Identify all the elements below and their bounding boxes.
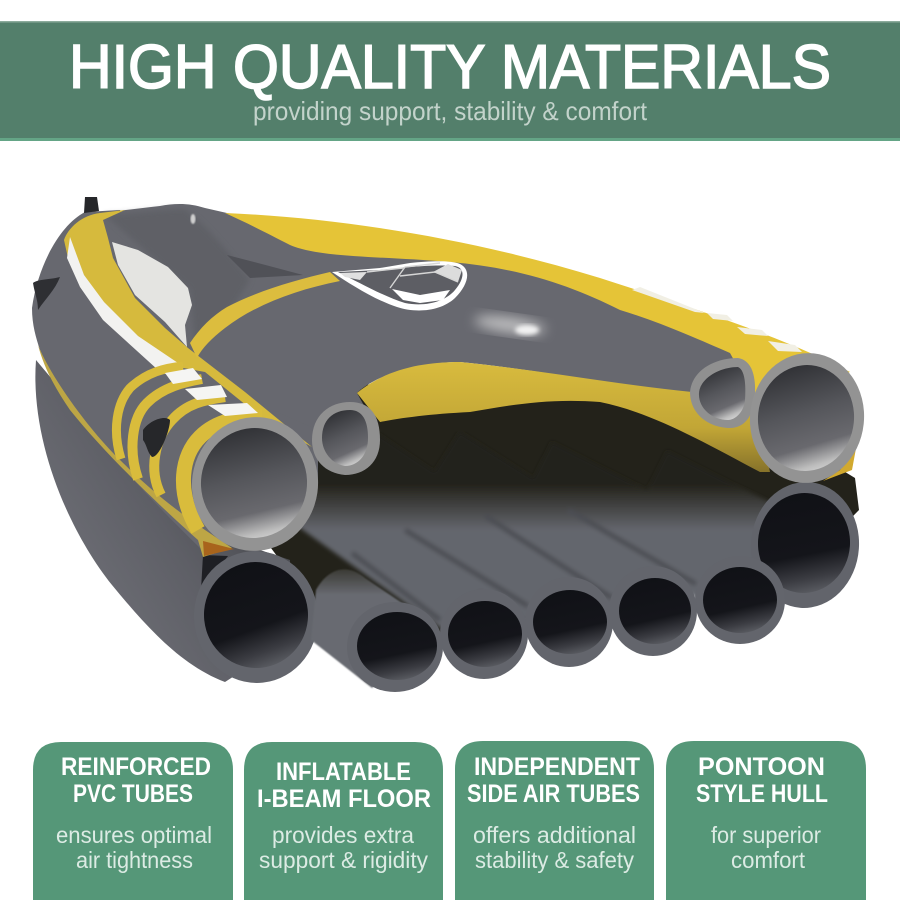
deck highlight core xyxy=(515,325,539,335)
card description: provides extra xyxy=(272,822,414,848)
white patches on left tube xyxy=(165,368,258,416)
floor tube end E xyxy=(609,566,697,656)
cockpit white panel xyxy=(112,242,192,347)
underside yellow band xyxy=(357,362,770,472)
card description: comfort xyxy=(731,847,806,873)
card heading: I-BEAM FLOOR xyxy=(257,785,431,813)
card description xyxy=(259,822,428,873)
seam flap left xyxy=(38,345,232,557)
card heading: INFLATABLE xyxy=(276,758,411,786)
valve: bow xyxy=(33,277,60,310)
right top yellow band xyxy=(225,213,850,405)
cross band yellow xyxy=(190,272,340,358)
logo badge xyxy=(332,261,467,310)
floor tube end F xyxy=(695,556,785,644)
subtitle: providing support, stability & comfort xyxy=(253,96,648,126)
header banner xyxy=(0,21,900,141)
card heading xyxy=(61,753,211,808)
right big air tube end xyxy=(744,347,870,489)
right white patches xyxy=(632,287,802,352)
card: inflatable I-beam floor xyxy=(244,742,443,900)
left yellow stripe xyxy=(64,210,312,447)
card description: stability & safety xyxy=(475,847,634,873)
right small air tube end xyxy=(690,358,755,428)
card description: ensures optimal xyxy=(56,822,212,848)
card heading: INDEPENDENT xyxy=(474,753,640,781)
card heading: PVC TUBES xyxy=(73,780,193,808)
card heading xyxy=(467,753,640,808)
floor tubes: bodies xyxy=(300,463,790,620)
cockpit shadow xyxy=(105,209,250,345)
card description: for superior xyxy=(711,822,821,848)
floor tube end D xyxy=(525,577,613,667)
logo white crescent xyxy=(392,289,450,303)
valve: left tube xyxy=(143,418,170,457)
left small air tube end xyxy=(312,402,380,475)
logo line work xyxy=(367,263,458,288)
floor tube B body xyxy=(311,569,435,688)
card description: air tightness xyxy=(76,847,193,873)
logo right facet xyxy=(433,264,462,282)
right flap xyxy=(823,443,857,481)
card heading: REINFORCED xyxy=(61,753,211,781)
lower pontoon hull: outer left tube xyxy=(35,360,325,689)
card description xyxy=(473,822,636,873)
left white stripe xyxy=(67,237,183,374)
kayak cross-section illustration xyxy=(32,197,870,692)
orange seam detail xyxy=(203,541,234,556)
valley shadows xyxy=(352,510,696,620)
cockpit floor panel xyxy=(227,255,303,278)
floor tube end B xyxy=(347,602,443,692)
card heading xyxy=(696,753,828,808)
card heading: PONTOON xyxy=(698,753,825,781)
card description xyxy=(56,822,212,873)
card heading: STYLE HULL xyxy=(696,780,828,808)
card description: offers additional xyxy=(473,822,636,848)
cockpit highlight dot xyxy=(190,214,196,224)
right outer tube end xyxy=(747,478,863,612)
logo left facet xyxy=(340,272,367,280)
title: HIGH QUALITY MATERIALS xyxy=(69,33,831,102)
left big air tube end xyxy=(183,409,327,559)
card description: support & rigidity xyxy=(259,847,428,873)
card: reinforced PVC tubes xyxy=(33,742,233,900)
dark gap under seam xyxy=(201,555,228,590)
card heading: SIDE AIR TUBES xyxy=(467,780,640,808)
main hull deck xyxy=(103,204,745,430)
stern yellow rings on left tube xyxy=(116,366,262,530)
card: pontoon style hull xyxy=(666,741,866,900)
interior shadow xyxy=(250,380,859,640)
card description xyxy=(711,822,821,873)
handle: bow top xyxy=(84,197,99,213)
card heading xyxy=(257,758,431,813)
floor tube end C xyxy=(440,589,528,679)
deck highlight xyxy=(473,312,547,338)
upper left tube body xyxy=(32,210,318,557)
card: independent side air tubes xyxy=(455,741,654,900)
